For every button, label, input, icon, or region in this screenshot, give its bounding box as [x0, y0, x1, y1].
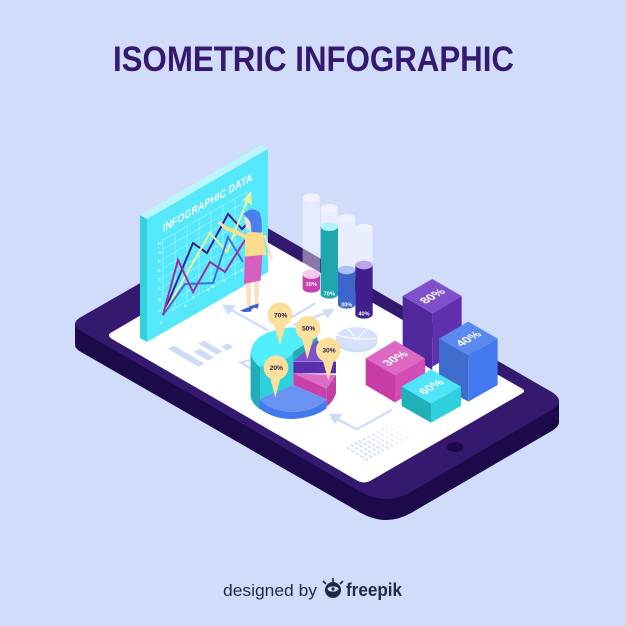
- block 80%: [403, 279, 462, 370]
- pin 20%: 20%: [270, 365, 283, 372]
- board axis labels: G: [158, 250, 162, 255]
- board axis labels: 7: [234, 272, 237, 277]
- legs: [245, 281, 259, 309]
- board axis labels: 1: [172, 307, 175, 312]
- board axis labels: 0: [160, 320, 163, 325]
- board axis labels: C: [158, 286, 162, 291]
- board axis labels: A: [158, 308, 162, 313]
- block 60%: [402, 369, 461, 423]
- woman presenter: [219, 209, 272, 312]
- board axis labels: 4: [207, 287, 210, 292]
- board axis labels: D: [158, 277, 162, 282]
- board axis labels: F: [158, 259, 161, 264]
- footer credit: freepik: [346, 580, 403, 600]
- cylinder bars: [303, 193, 373, 319]
- block 40%: 40%: [452, 329, 485, 348]
- data table: [347, 423, 413, 461]
- shoes: [240, 303, 259, 312]
- title: ISOMETRIC INFOGRAPHIC: [113, 39, 514, 79]
- blue slice: [259, 385, 327, 419]
- screen decorations: arrows and minibars: [168, 303, 413, 461]
- block 30%: [366, 341, 425, 402]
- elbow line: [241, 357, 260, 372]
- phone home button: [446, 442, 464, 452]
- board axis labels: [158, 241, 244, 325]
- hair: [243, 209, 262, 233]
- information board: [140, 145, 268, 342]
- skirt: [244, 255, 262, 284]
- board axis labels: H: [158, 241, 161, 246]
- cylinder 40%: 40%: [358, 312, 370, 318]
- cylinder 70%: 70%: [324, 292, 335, 298]
- block 80%: 80%: [416, 286, 449, 306]
- board axis labels: 5: [212, 284, 215, 289]
- arrow: upper right: [292, 303, 335, 325]
- pink slice: [293, 373, 336, 407]
- board axis labels: E: [158, 268, 161, 273]
- footer credit: [223, 578, 403, 600]
- phone screen: [109, 242, 524, 482]
- face: [244, 217, 251, 231]
- block 30%: 30%: [379, 349, 412, 368]
- pin 50%: 50%: [302, 326, 315, 333]
- icon: freepik logo: [323, 578, 343, 598]
- pin 30%: 30%: [322, 347, 336, 354]
- block 60%: 60%: [415, 377, 448, 396]
- board axis labels: B: [158, 297, 162, 302]
- cylinder 30%: 30%: [341, 302, 352, 308]
- mini bar chart: [168, 341, 233, 367]
- 3D pie chart: [251, 302, 378, 419]
- footer credit: designed by: [223, 581, 318, 600]
- block bars: [366, 279, 498, 423]
- purple slice: [293, 340, 336, 373]
- pin 70%: 70%: [274, 312, 287, 319]
- arms: [264, 235, 272, 260]
- board axis labels: 6: [223, 278, 226, 283]
- board heading: INFOGRAPHIC DATA: [163, 171, 252, 235]
- torso: [245, 231, 267, 257]
- cylinder 20%: 20%: [306, 282, 317, 288]
- phone body: [75, 224, 559, 520]
- line chart: [163, 191, 252, 315]
- board grid: [163, 192, 247, 315]
- board axis labels: 8: [241, 268, 244, 273]
- cyan slice: [251, 327, 317, 409]
- board axis labels: 2: [184, 303, 187, 308]
- arrow: lower: [329, 410, 392, 429]
- small pie icon: [336, 327, 378, 352]
- block 40%: [439, 322, 498, 402]
- board axis labels: 3: [192, 295, 195, 300]
- arrow: upper left: [222, 305, 268, 331]
